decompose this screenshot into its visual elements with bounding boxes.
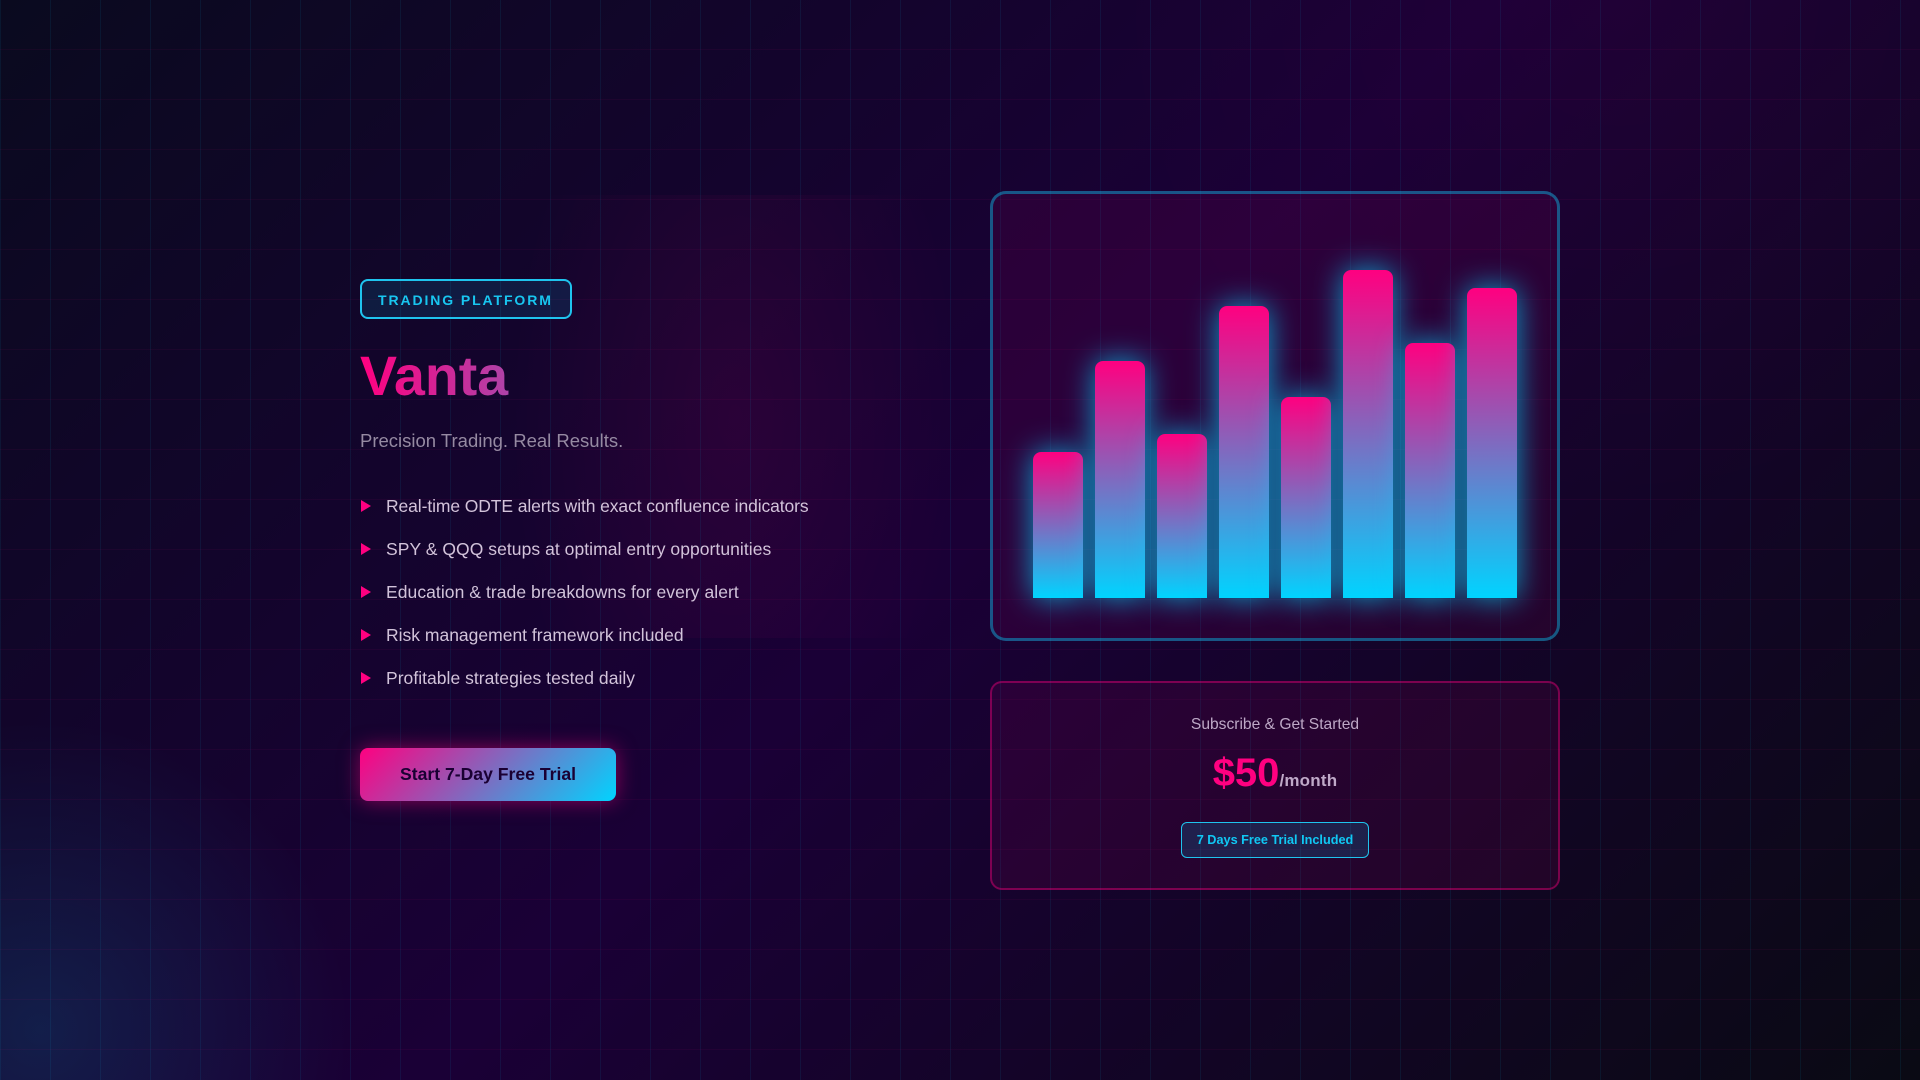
bar chart bars xyxy=(1010,248,1540,620)
title: Vanta xyxy=(360,345,508,407)
list item 1: Real-time ODTE alerts with exact confluence indicators xyxy=(386,496,809,516)
panel: bar chart xyxy=(990,191,1560,641)
button: start trial xyxy=(360,748,616,801)
list item 5: Profitable strategies tested daily xyxy=(386,668,635,688)
bar 6 xyxy=(1343,270,1393,598)
badge: trading platform: TRADING PLATFORM xyxy=(378,292,553,308)
bar 1 xyxy=(1033,452,1083,598)
bar 7 xyxy=(1405,343,1455,598)
bar 8 xyxy=(1467,288,1517,598)
trial note xyxy=(1181,822,1369,858)
list item 2: SPY & QQQ setups at optimal entry opportunities xyxy=(386,538,771,558)
background glow: central pink xyxy=(500,195,980,638)
feature list xyxy=(361,496,809,688)
list item 3: Education & trade breakdowns for every alert xyxy=(386,582,739,602)
panel: pricing xyxy=(990,681,1560,890)
bar 5 xyxy=(1281,397,1331,598)
subtitle: Precision Trading. Real Results. xyxy=(360,430,623,451)
bar 3 xyxy=(1157,434,1207,598)
trial note: 7 Days Free Trial Included xyxy=(1197,833,1353,847)
bar 4 xyxy=(1219,306,1269,598)
price: $50/month xyxy=(1213,751,1337,795)
badge: trading platform xyxy=(360,279,572,319)
bar 2 xyxy=(1095,361,1145,598)
button: start trial: Start 7-Day Free Trial xyxy=(400,764,576,784)
title xyxy=(360,344,830,408)
list item 4: Risk management framework included xyxy=(386,624,684,644)
pricing label: Subscribe & Get Started xyxy=(1191,716,1359,733)
